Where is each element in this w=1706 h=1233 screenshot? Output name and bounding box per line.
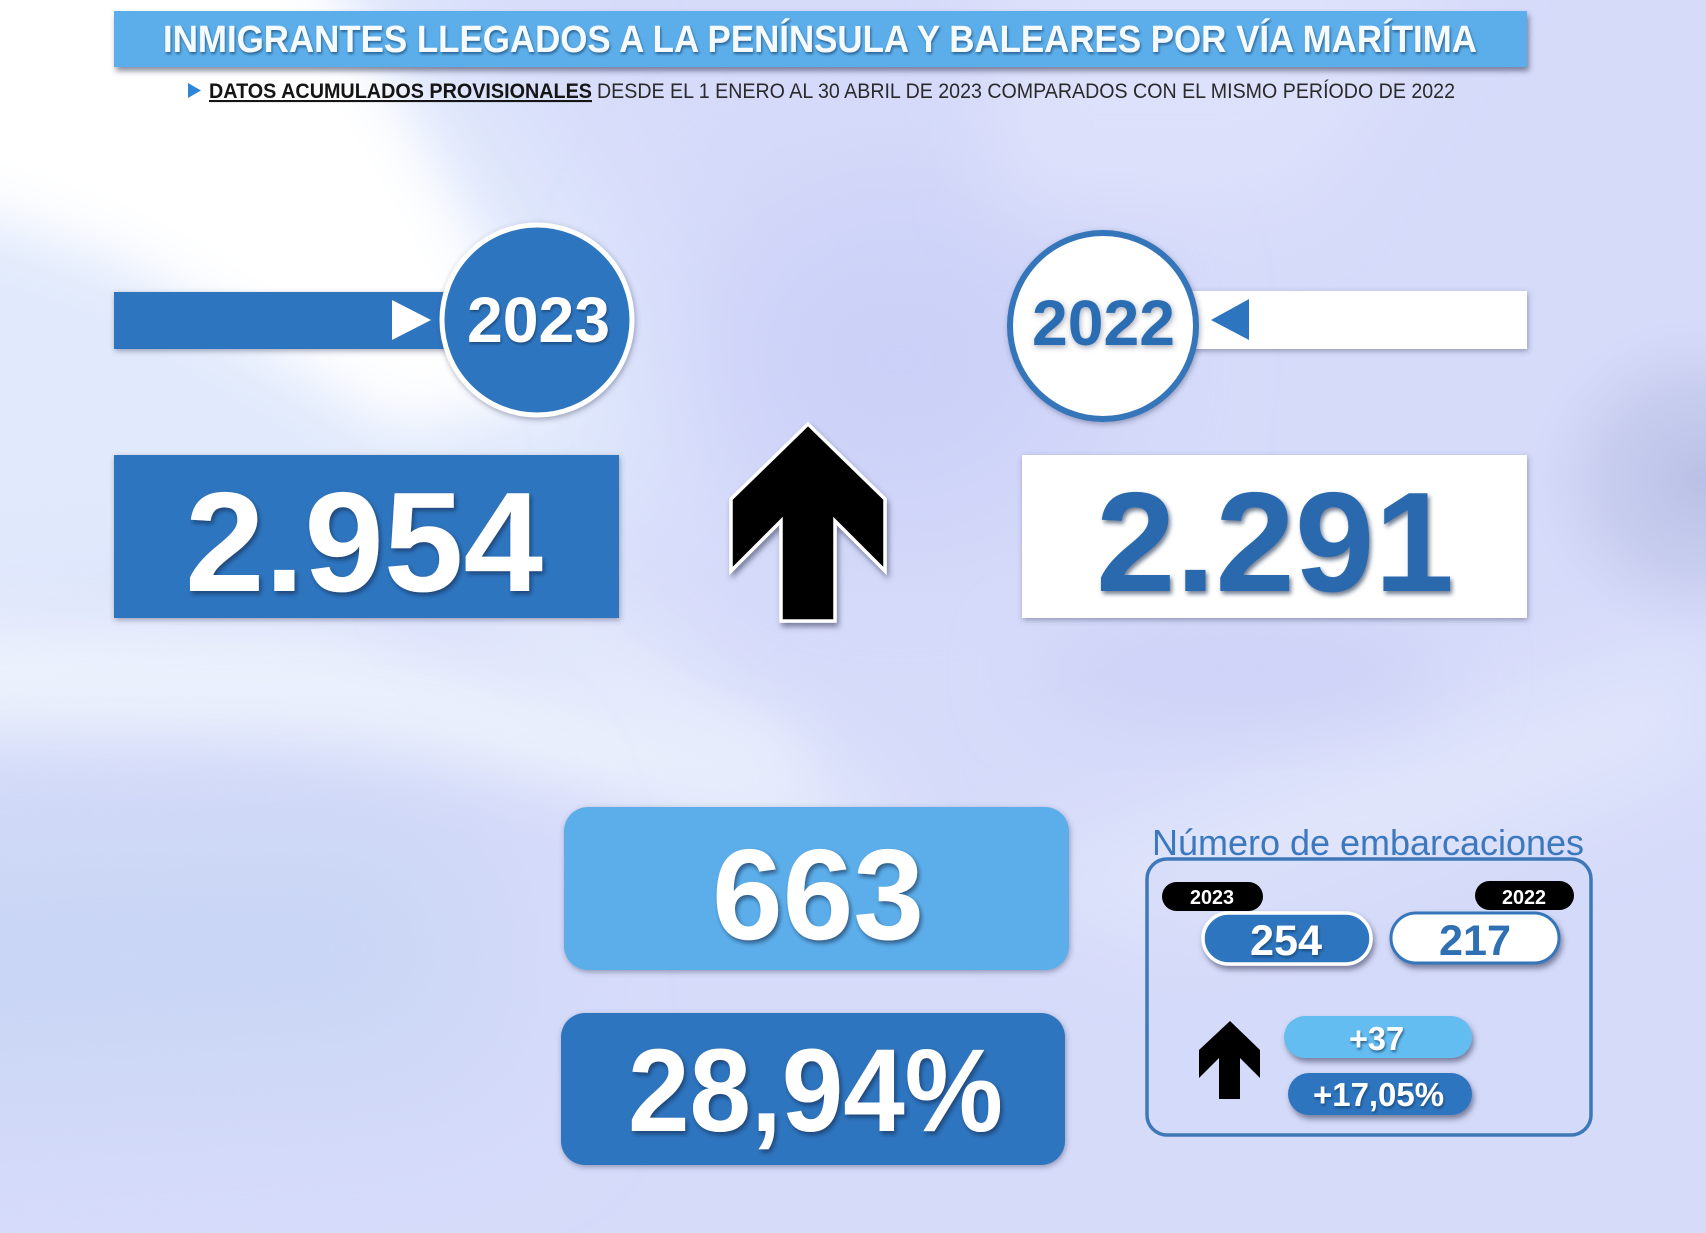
value: +17,05%: +17,05%	[1313, 1076, 1444, 1113]
panel: 2023 total: 2.954	[185, 463, 543, 622]
value: 254 boats in 2023: 254	[1250, 917, 1322, 965]
panel: 2022 total	[1022, 455, 1527, 622]
panel: 2022 year marker: 2022	[1032, 287, 1175, 359]
title banner: INMIGRANTES LLEGADOS A LA PENÍNSULA Y BALEARES POR VÍA MARÍTIMA	[163, 17, 1477, 61]
badge: 2022: 2022	[1502, 887, 1546, 909]
boats panel frame	[1147, 859, 1591, 1135]
icon: large up arrow	[731, 424, 885, 621]
subtitle	[188, 80, 1455, 103]
badge: 2023	[1162, 882, 1263, 911]
panel: 2022 year marker	[1010, 233, 1527, 419]
value: 254 boats in 2023	[1203, 913, 1371, 965]
subtitle: DATOS ACUMULADOS PROVISIONALES	[209, 80, 592, 103]
panel: 2023 total	[114, 455, 619, 622]
panel: number of boats	[1147, 822, 1591, 1135]
title banner	[114, 11, 1527, 67]
value: 217 boats in 2022	[1391, 913, 1559, 965]
value: +17,05%	[1288, 1073, 1472, 1115]
value: +37: +37	[1349, 1020, 1404, 1057]
value: +37	[1284, 1016, 1472, 1058]
heading: número de embarcaciones: Número de embarcaciones	[1152, 822, 1584, 863]
badge: 2022	[1475, 881, 1574, 910]
icon: small up arrow	[1199, 1021, 1260, 1099]
panel: absolute difference: 663	[712, 823, 924, 967]
subtitle: DESDE EL 1 ENERO AL 30 ABRIL DE 2023 COMPARADOS CON EL MISMO PERÍODO DE 2022	[597, 80, 1455, 103]
value: 217 boats in 2022: 217	[1439, 917, 1511, 965]
panel: 2022 total: 2.291	[1096, 463, 1454, 622]
panel: percentage difference: 28,94%	[628, 1025, 1003, 1157]
badge: 2023: 2023	[1190, 887, 1234, 909]
panel: 2023 year marker	[114, 225, 632, 415]
panel: percentage difference	[561, 1013, 1065, 1165]
panel: absolute difference	[564, 807, 1069, 970]
panel: 2023 year marker: 2023	[467, 284, 610, 356]
